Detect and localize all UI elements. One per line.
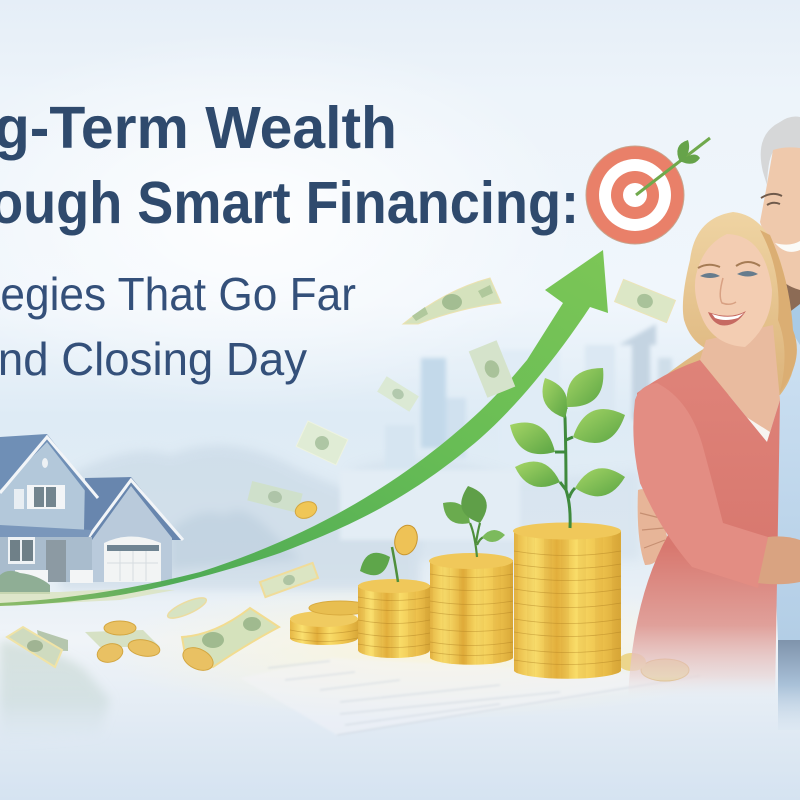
title	[0, 95, 579, 236]
attic vent	[42, 458, 48, 468]
banknote	[247, 481, 303, 513]
financial document on the ground	[240, 658, 707, 735]
banknote	[85, 630, 160, 647]
banknote	[165, 594, 209, 622]
banknote	[403, 278, 501, 324]
growth arrow	[0, 250, 608, 606]
woman: face	[695, 234, 772, 347]
man: face	[760, 147, 800, 290]
city skyline	[340, 324, 672, 540]
woman: back hair	[662, 212, 795, 395]
main roof	[0, 434, 98, 520]
house	[0, 434, 183, 606]
target icon	[586, 138, 710, 244]
small sprout with coin	[360, 523, 421, 582]
man: brow and eye	[761, 194, 782, 205]
woman: smile	[708, 311, 746, 325]
shrubs	[0, 571, 50, 594]
man: shirt	[772, 305, 800, 640]
woman: eyes	[700, 271, 758, 278]
roof of garage wing	[84, 477, 183, 540]
man: smile	[775, 241, 800, 252]
woman: neck	[700, 325, 780, 442]
man: neck shadow	[770, 270, 800, 325]
banknote	[377, 376, 419, 412]
coin stack 3	[429, 553, 513, 665]
man: belt and jeans	[778, 640, 800, 730]
flying banknotes	[7, 278, 675, 667]
man: hand	[638, 489, 668, 565]
woman: sweater body	[628, 360, 780, 700]
dart arrow	[636, 138, 710, 195]
man: collar	[787, 304, 800, 345]
man: forearm	[758, 536, 800, 584]
banknote	[7, 627, 68, 667]
hazy mountains	[60, 445, 640, 590]
garage door	[104, 536, 161, 582]
banknote	[296, 421, 348, 465]
foreground grass	[0, 640, 110, 745]
tall sapling	[510, 368, 625, 528]
woman: undershirt	[740, 413, 770, 442]
woman: brows	[698, 262, 760, 268]
woman: front hair strand	[760, 230, 797, 392]
upper window	[14, 485, 65, 509]
coin stack 1	[290, 601, 371, 645]
banknote	[260, 563, 318, 597]
gable trim	[0, 437, 183, 540]
main wall	[0, 442, 86, 530]
medium sprout	[443, 486, 505, 557]
porch railing	[15, 570, 93, 583]
subtitle	[0, 268, 356, 385]
banknote	[469, 340, 515, 398]
porch wall	[0, 537, 92, 582]
lawn	[0, 589, 175, 606]
woman: sweater sleeve	[633, 383, 768, 588]
man: hair	[761, 117, 800, 185]
porch roof	[0, 525, 92, 538]
couple	[628, 117, 800, 730]
banknote	[182, 608, 279, 667]
porch window	[8, 537, 35, 564]
coin stack 4	[513, 522, 621, 679]
coin stack 2	[358, 579, 430, 658]
garage wall	[92, 486, 172, 582]
banknote	[615, 279, 675, 323]
loose coins	[95, 499, 689, 681]
front door	[46, 540, 66, 582]
woman: nose	[720, 278, 736, 304]
